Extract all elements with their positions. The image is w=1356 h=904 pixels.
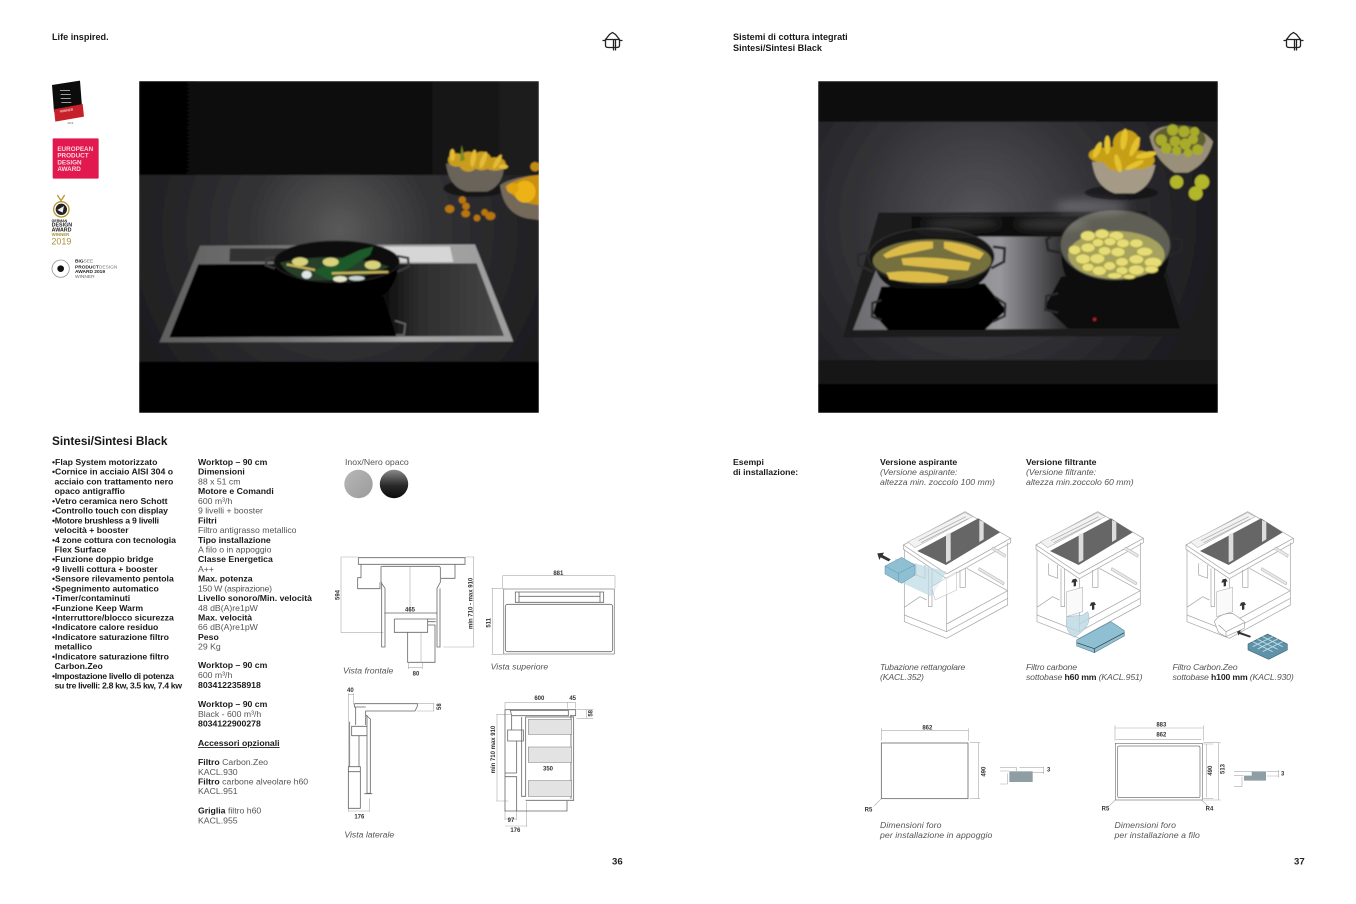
drawing: section view — [491, 696, 595, 834]
text block: feature list: acciaio con trattamento nero — [54, 476, 173, 486]
text block: technical specifications: Motore e Comandi — [198, 486, 274, 496]
header: section title right page: Sistemi di cottura integrati — [733, 32, 848, 42]
drawing: flush mount cut-out: 3 — [1281, 772, 1285, 778]
icon: brand logo left page — [602, 32, 622, 50]
caption: Vista superiore: Vista superiore — [491, 661, 548, 671]
text block: optional accessories: Griglia filtro h60 — [198, 806, 261, 816]
captions: cut-out drawings — [879, 820, 1200, 840]
captions: installation diagrams: sottobase h100 mm (KACL.930) — [1172, 672, 1294, 682]
drawing: front view — [336, 557, 474, 677]
text block: feature list: •Flap System motorizzato — [52, 457, 157, 467]
captions: installation diagrams: sottobase h60 mm (KACL.951) — [1026, 672, 1143, 682]
drawing: flush mount cut-out: R5 — [1102, 807, 1110, 813]
heading: product name: Sintesi/Sintesi Black — [52, 434, 168, 448]
text block: product codes: Black - 600 m³/h — [198, 709, 261, 719]
drawing: side view: 58 — [437, 703, 443, 710]
header: section title right page: Sintesi/Sintesi Black — [733, 43, 823, 53]
drawing: front view: min 710 - max 910 — [468, 577, 474, 629]
icon: Big See Product Design Award — [52, 259, 118, 280]
text block: technical specifications: 29 Kg — [198, 642, 221, 652]
icon: German Design Award — [51, 195, 72, 246]
text block: feature list: •Interruttore/blocco sicurezza — [52, 612, 174, 622]
drawing: surface mount cut-out: 3 — [1047, 768, 1051, 774]
drawing: top view: 511 — [486, 617, 492, 628]
captions: installation diagrams: Filtro Carbon.Zeo — [1172, 662, 1238, 672]
icon: European Product Design Award — [53, 138, 99, 179]
text block: installation label: Esempi — [733, 457, 764, 467]
icon: Big See Product Design Award: WINNER — [75, 274, 95, 280]
text block: filtering version: Versione filtrante — [1026, 457, 1097, 467]
text block: optional accessories: KACL.951 — [198, 786, 238, 796]
text block: installation label: di installazione: — [733, 467, 798, 477]
text block: technical specifications: Livello sonoro/Min. velocità — [198, 593, 312, 603]
text block: feature list: su tre livelli: 2.8 kw, 3.5 kw, 7.4 kw — [54, 681, 182, 691]
text block: feature list: •Spegnimento automatico — [52, 583, 159, 593]
icon: architects award badge — [52, 81, 84, 125]
drawing: section view: 600 — [534, 696, 545, 702]
drawing: surface mount cut-out: 490 — [981, 766, 987, 777]
captions: cut-out drawings: Dimensioni foro — [1114, 820, 1176, 830]
drawing: section view: 350 — [543, 767, 554, 773]
icon: German Design Award: 2019 — [51, 236, 71, 246]
drawing: side view: 176 — [354, 815, 365, 821]
captions: installation diagrams: Filtro carbone — [1026, 662, 1077, 672]
text block: feature list: •Controllo touch con display — [52, 506, 168, 516]
drawing: side view: 40 — [347, 688, 354, 694]
caption: Vista laterale: Vista laterale — [344, 830, 394, 840]
text block: feature list: •4 zone cottura con tecnologia — [52, 535, 176, 545]
text block: filtering version: altezza min.zoccolo 60 mm) — [1026, 477, 1134, 487]
text block: technical specifications: Classe Energetica — [198, 554, 273, 564]
text block: feature list: •Cornice in acciaio AISI 304 o — [52, 467, 173, 477]
captions: cut-out drawings: per installazione in appoggio — [879, 830, 993, 840]
drawing: side view — [347, 688, 443, 821]
captions: installation diagrams: Tubazione rettangolare — [880, 662, 966, 672]
photo: hob with two pots and steam — [818, 81, 1218, 413]
captions: cut-out drawings: Dimensioni foro — [880, 820, 942, 830]
drawing: section view: 176 — [510, 828, 521, 834]
drawing: flush mount cut-out: 883 — [1156, 722, 1167, 728]
text block: technical specifications: 600 m³/h — [198, 496, 232, 506]
header: Life inspired: Life inspired. — [52, 32, 109, 42]
text block: optional accessories: Accessori opzionali — [198, 738, 280, 748]
text block: feature list: •Funzione Keep Warm — [52, 603, 143, 613]
text block: technical specifications: Tipo installazione — [198, 535, 271, 545]
text block: feature list: •Indicatore saturazione filtro — [52, 651, 169, 661]
text block: technical specifications: Max. velocità — [198, 612, 252, 622]
text block: technical specifications: 88 x 51 cm — [198, 476, 240, 486]
cut-out dimension drawings — [865, 722, 1285, 813]
text block: technical specifications: Peso — [198, 632, 219, 642]
finish swatches — [344, 457, 409, 498]
text block: feature list: Flex Surface — [54, 544, 106, 554]
text block: product codes: Worktop – 90 cm — [198, 660, 268, 670]
text block: technical specifications: 66 dB(A)re1pW — [198, 622, 259, 632]
text block: product codes: Worktop – 90 cm — [198, 699, 268, 709]
text block: product codes: 8034122900278 — [198, 718, 261, 728]
finish swatches: Inox/Nero opaco — [345, 457, 409, 467]
text block: feature list: •Sensore rilevamento pentola — [52, 574, 174, 584]
icon: German Design Award: DESIGN — [52, 223, 72, 229]
drawing: section view: 58 — [589, 709, 595, 717]
text block: feature list: •Funzione doppio bridge — [52, 554, 154, 564]
text block: product codes: 8034122358918 — [198, 680, 261, 690]
drawing: section view: 97 — [508, 818, 515, 824]
drawing: surface mount cut-out: R5 — [865, 807, 873, 813]
technical drawings — [336, 557, 615, 840]
captions: installation diagrams: (KACL.352) — [880, 672, 924, 682]
text block: optional accessories: KACL.955 — [198, 816, 238, 826]
page number 36: 36 — [612, 856, 623, 868]
isometric installation diagrams — [877, 512, 1293, 659]
text block: feature list: •Motore brushless a 9 livelli — [52, 515, 159, 525]
icon: Big See Product Design Award: BIGSEE — [75, 259, 94, 265]
text block: technical specifications: Max. potenza — [198, 574, 253, 584]
text block: filtering version — [1026, 457, 1134, 487]
icon: architects award badge: WINNER — [60, 107, 74, 114]
drawing: flush mount cut-out: 513 — [1221, 763, 1227, 774]
text block: feature list: opaco antigraffio — [54, 486, 125, 496]
drawing: flush mount cut-out: 490 — [1208, 765, 1214, 776]
text block: feature list: Carbon.Zeo — [54, 661, 103, 671]
drawing: front view: 465 — [405, 608, 416, 614]
text block: technical specifications: 150 W (aspirazione) — [198, 583, 272, 593]
text block: technical specifications: Worktop – 90 cm — [198, 457, 268, 467]
text block: technical specifications: 48 dB(A)re1pW — [198, 603, 259, 613]
text block: technical specifications: A++ — [198, 564, 214, 574]
caption: Vista frontale: Vista frontale — [343, 665, 394, 675]
text block: optional accessories — [198, 738, 308, 826]
icon: European Product Design Award: DESIGN — [57, 159, 82, 166]
text block: technical specifications: Dimensioni — [198, 467, 245, 477]
drawing: surface mount cut-out — [865, 726, 1051, 813]
text block: technical specifications: Filtro antigrasso metallico — [198, 525, 297, 535]
drawing: front view: 594 — [336, 589, 342, 600]
text block: feature list: •Indicatore saturazione filtro — [52, 632, 169, 642]
captions: cut-out drawings: per installazione a filo — [1114, 830, 1200, 840]
drawing: surface mount cut-out: 862 — [922, 726, 933, 732]
text block: product codes — [198, 660, 268, 728]
panel: design awards — [51, 81, 118, 280]
diagram: carbon filter h60 — [1036, 512, 1143, 653]
text block: technical specifications: A filo o in appoggio — [198, 544, 272, 554]
text block: feature list: •Timer/contaminuti — [52, 593, 130, 603]
drawing: top view: 881 — [553, 571, 564, 577]
drawing: flush mount cut-out — [1102, 722, 1285, 813]
text block: ducted version: Versione aspirante — [880, 457, 957, 467]
text block: ducted version: altezza min. zoccolo 100 mm) — [880, 477, 995, 487]
icon: European Product Design Award: EUROPEAN — [57, 146, 94, 153]
icon: Big See Product Design Award: AWARD 2019 — [75, 269, 105, 275]
text block: feature list: •9 livelli cottura + booster — [52, 564, 158, 574]
icon: German Design Award: GERMAN — [52, 219, 68, 223]
icon: European Product Design Award: PRODUCT — [57, 153, 89, 160]
text block: technical specifications — [198, 457, 312, 652]
drawing: section view: 45 — [569, 696, 577, 702]
icon: European Product Design Award: AWARD — [57, 166, 81, 173]
text block: ducted version — [880, 457, 995, 487]
page number 37: 37 — [1294, 856, 1305, 868]
text block: feature list: metallico — [54, 642, 92, 652]
photo: hob with single pot — [139, 81, 539, 413]
header: section title right page — [733, 32, 848, 53]
captions: installation diagrams — [880, 662, 1294, 682]
icon: architects award badge: 2019 — [67, 121, 74, 125]
icon: German Design Award: AWARD — [52, 228, 72, 234]
text block: ducted version: (Versione aspirante: — [880, 467, 958, 477]
text block: filtering version: (Versione filtrante: — [1026, 467, 1097, 477]
text block: optional accessories: KACL.930 — [198, 767, 238, 777]
drawing: section view: min 710 max 910 — [491, 725, 497, 773]
text block: technical specifications: Filtri — [198, 515, 217, 525]
text block: optional accessories: Filtro carbone alveolare h60 — [198, 776, 308, 786]
text block: installation label — [733, 457, 798, 477]
diagram: rectangular duct installation — [877, 512, 1011, 638]
icon: Big See Product Design Award: PRODUCTDESIGN — [75, 264, 118, 270]
text block: feature list — [52, 457, 182, 691]
text block: technical specifications: 9 livelli + booster — [198, 506, 263, 516]
text block: feature list: •Indicatore calore residuo — [52, 622, 158, 632]
icon: German Design Award: WINNER — [52, 232, 70, 237]
text block: product codes: 600 m³/h — [198, 670, 232, 680]
text block: optional accessories: Filtro Carbon.Zeo — [198, 757, 268, 767]
drawing: flush mount cut-out: R4 — [1206, 807, 1214, 813]
text block: feature list: velocità + booster — [54, 525, 129, 535]
drawing: top view — [486, 571, 615, 654]
text block: feature list: •Vetro ceramica nero Schott — [52, 496, 168, 506]
drawing: front view: 80 — [413, 671, 420, 677]
drawing: flush mount cut-out: 862 — [1156, 733, 1167, 739]
icon: brand logo right page — [1284, 32, 1304, 50]
text block: feature list: •Impostazione livello di potenza — [52, 671, 174, 681]
diagram: Carbon.Zeo filter h100 — [1186, 512, 1293, 659]
